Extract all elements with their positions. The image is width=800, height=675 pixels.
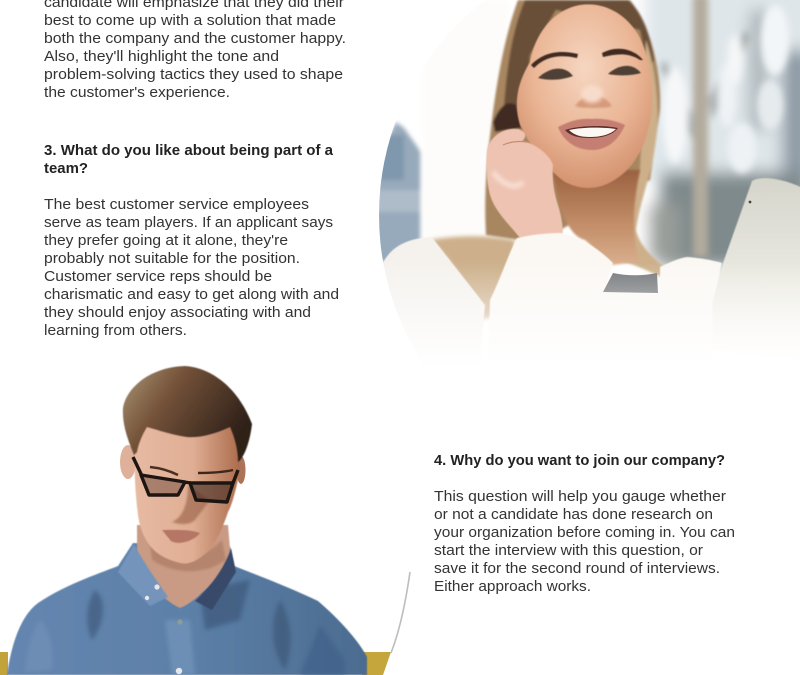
mouth	[162, 530, 200, 543]
text block: answer 3: Customer service reps should be	[44, 268, 272, 285]
hair	[123, 366, 252, 462]
curved edge	[391, 572, 410, 653]
text block: answer 4: save it for the second round of interviews.	[434, 560, 720, 577]
heading: question 3: team?	[44, 160, 88, 177]
tablet	[712, 178, 800, 324]
text block: answer 4: This question will help you gauge whether	[434, 488, 726, 505]
building at left	[376, 122, 421, 262]
text block: answer 4: start the interview with this question, or	[434, 542, 703, 559]
text block: answer 3: they prefer going at it alone, they're	[44, 232, 288, 249]
text block: answer 3: they should enjoy associating with and	[44, 304, 311, 321]
ears	[120, 445, 136, 479]
neck	[137, 525, 231, 608]
text block: answer 4: Either approach works.	[434, 578, 591, 595]
eyes	[538, 69, 573, 80]
smile	[558, 119, 625, 150]
nose shadow	[172, 485, 210, 524]
face	[135, 420, 240, 564]
heading: question 4: 4. Why do you want to join our company?	[434, 452, 725, 469]
heading: question 3: 3. What do you like about being part of a	[44, 142, 334, 159]
text block: end of answer 2: problem-solving tactics they used to shape	[44, 66, 343, 83]
shirt	[7, 543, 367, 675]
text block: answer 4	[434, 488, 735, 595]
eyebrows	[531, 52, 578, 68]
text block: end of answer 2: best to come up with a solution that made	[44, 12, 336, 29]
text block: answer 3: probably not suitable for the position.	[44, 250, 300, 267]
hand	[486, 129, 563, 238]
dark top at neckline	[603, 273, 658, 293]
text block: answer 3: serve as team players. If an applicant says	[44, 214, 333, 231]
yellow sofa	[0, 652, 391, 675]
nose	[575, 97, 612, 109]
bright facade	[418, 150, 423, 238]
text block: answer 3: learning from others.	[44, 322, 187, 339]
long blond hair at left	[430, 236, 520, 320]
photo: smiling woman on phone with tablet	[379, 0, 800, 324]
text block: end of answer 2: both the company and the customer happy.	[44, 30, 346, 47]
white jacket	[384, 232, 722, 320]
neck	[552, 168, 640, 265]
text block: answer 4: or not a candidate has done research on	[434, 506, 713, 523]
heading: question 3	[44, 142, 334, 177]
photo: man with glasses looking down	[0, 366, 410, 675]
glasses	[133, 457, 238, 502]
buttons	[145, 584, 183, 674]
text block: end of answer 2	[44, 0, 346, 101]
hair around the face	[484, 0, 664, 278]
text block: end of answer 2: the customer's experience.	[44, 84, 230, 101]
face	[517, 4, 652, 188]
bottom fade to white	[398, 270, 800, 365]
blurred tree background	[645, 0, 800, 267]
text block: answer 3: charismatic and easy to get along with and	[44, 286, 339, 303]
text block: answer 3: The best customer service employees	[44, 196, 309, 213]
text block: answer 3	[44, 196, 339, 339]
text block: end of answer 2: Also, they'll highlight the tone and	[44, 48, 279, 65]
text block: answer 4: your organization before coming in. You can	[434, 524, 735, 541]
collar	[118, 544, 168, 606]
eyebrows	[150, 467, 178, 475]
